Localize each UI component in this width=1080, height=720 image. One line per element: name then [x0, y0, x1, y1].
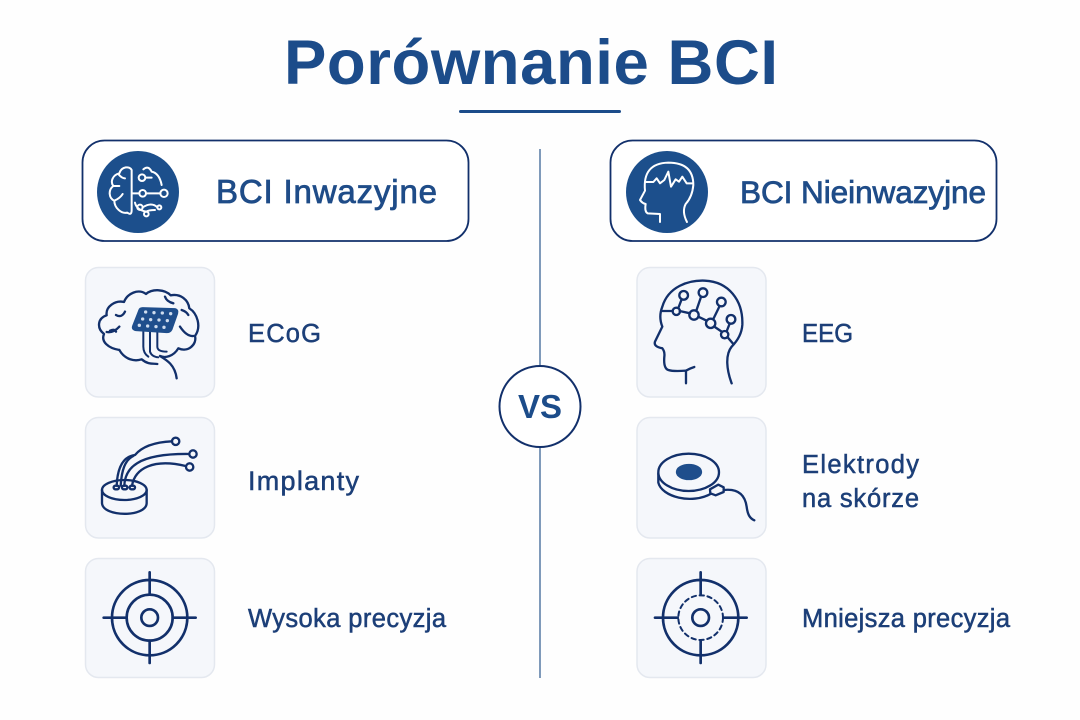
- icon: head with brain wave: [626, 151, 708, 233]
- card: implants: [86, 418, 360, 538]
- heading: invasive: BCI Inwazyjne: [216, 173, 437, 210]
- label: implants: Implanty: [248, 466, 360, 496]
- label: skin electrodes: Elektrody: [802, 451, 919, 479]
- label: EEG: EEG: [802, 320, 853, 348]
- card: ECoG: [86, 268, 321, 397]
- icon: head with EEG electrodes: [655, 281, 742, 383]
- card: high precision: [86, 558, 447, 678]
- icon: implant with wires: [102, 438, 197, 514]
- card: EEG: [637, 268, 853, 397]
- icon: brain circuit: [97, 151, 179, 233]
- title underline: [459, 110, 621, 113]
- icon: brain with electrode grid: [99, 290, 198, 378]
- label: lower precision: Mniejsza precyzja: [802, 605, 1011, 633]
- panel: invasive header: [82, 140, 468, 241]
- icon: surface electrode with cable: [658, 454, 754, 520]
- center divider: [539, 149, 541, 678]
- label: ECoG: ECoG: [248, 320, 321, 348]
- title: Porównanie BCI: [284, 28, 778, 98]
- card: skin electrodes: [637, 418, 919, 538]
- label: skin electrodes: na skórze: [802, 485, 919, 513]
- VS badge: [500, 366, 580, 447]
- heading: non-invasive: BCI Nieinwazyjne: [740, 174, 986, 210]
- label: high precision: Wysoka precyzja: [248, 605, 447, 633]
- card: lower precision: [637, 558, 1011, 678]
- icon: target solid rings: [104, 572, 196, 663]
- panel: non-invasive header: [610, 140, 996, 241]
- icon: target dashed ring: [655, 572, 747, 663]
- VS badge: VS: [518, 388, 562, 425]
- label: skin electrodes: [802, 451, 919, 513]
